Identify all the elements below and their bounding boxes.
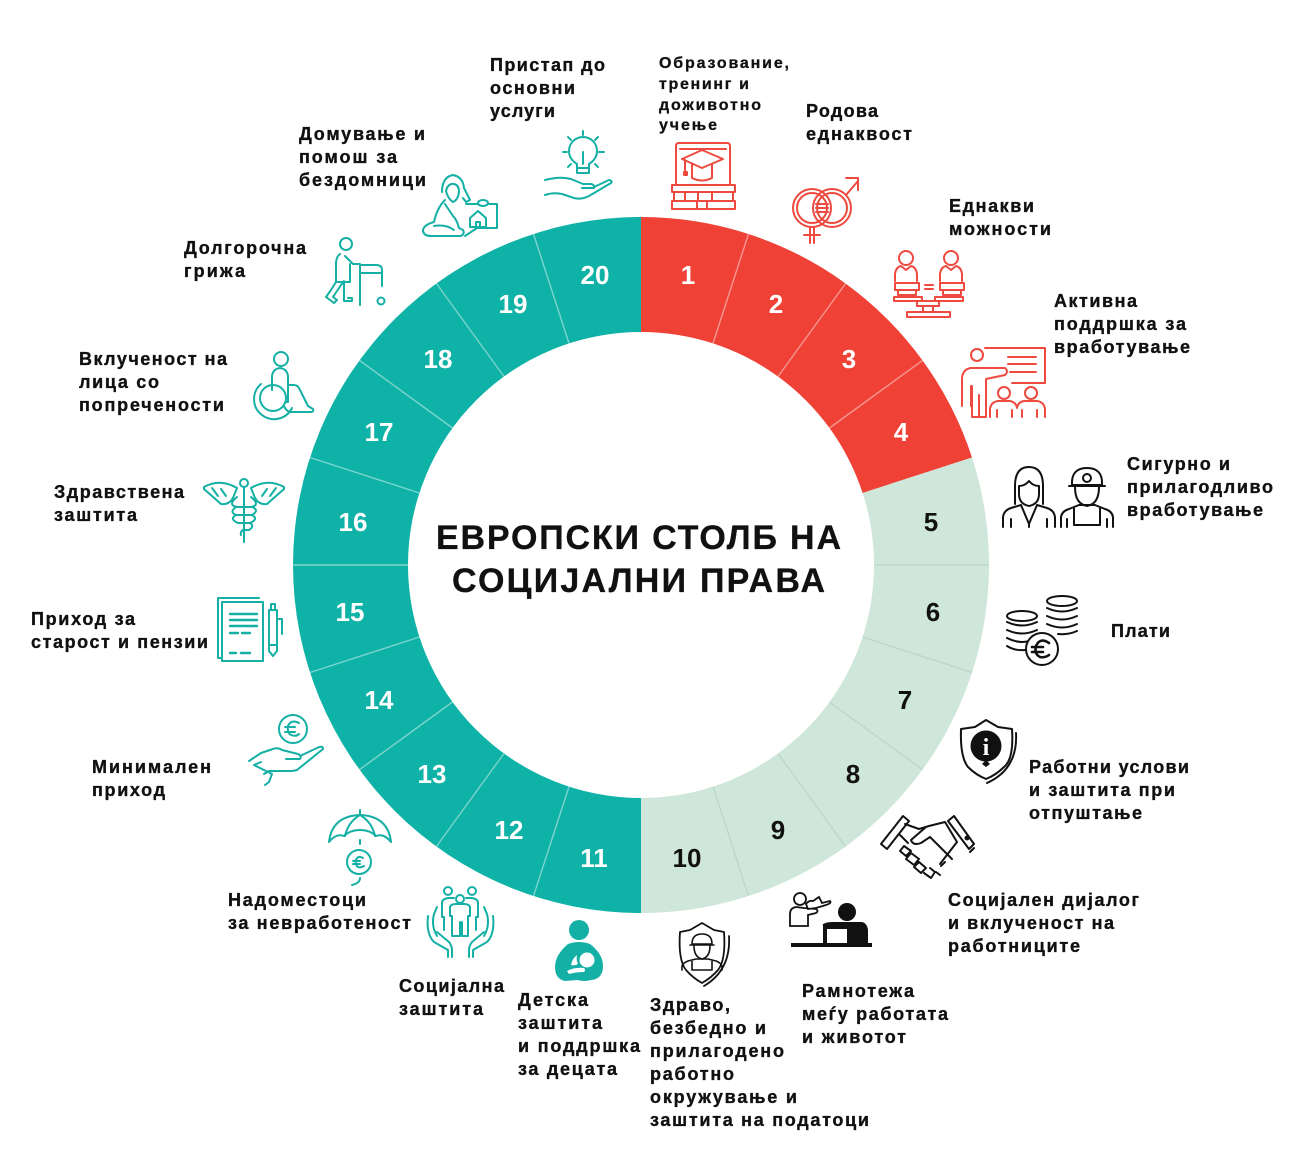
icon: equal opportunities scales bbox=[894, 251, 964, 317]
label: working conditions: Работни услови bbox=[1029, 757, 1189, 777]
segment numbers: 20 bbox=[581, 260, 609, 290]
label: access to essential services: Пристап до bbox=[490, 55, 605, 75]
icon: woman and miner bbox=[1003, 467, 1113, 527]
label: long-term care bbox=[184, 238, 307, 281]
label: healthy and safe work: безбедно и bbox=[650, 1018, 766, 1038]
icon: family in hands bbox=[428, 887, 493, 957]
icon: education laptop, cap and books bbox=[672, 143, 735, 209]
icon: homeless person with house bbox=[423, 175, 497, 236]
label: social dialogue: Социјален дијалог bbox=[948, 890, 1140, 910]
icon: gender equality bbox=[793, 178, 858, 243]
icon: umbrella with euro bbox=[329, 810, 391, 885]
title: СОЦИЈАЛНИ ПРАВА bbox=[452, 562, 825, 600]
label: work-life balance: Рамнотежа bbox=[802, 981, 915, 1001]
segment numbers: 12 bbox=[495, 815, 523, 845]
label: healthy and safe work: Здраво, bbox=[650, 995, 730, 1015]
label: unemployment benefits: Надоместоци bbox=[228, 890, 366, 910]
label: social dialogue bbox=[948, 890, 1140, 956]
label: inclusion of people with disabilities: попречености bbox=[79, 395, 224, 415]
segment group: pale green pillars 5-10 bbox=[641, 458, 989, 913]
title bbox=[436, 519, 841, 600]
label: gender equality: еднаквост bbox=[806, 124, 912, 144]
label: active employment support: Активна bbox=[1054, 291, 1138, 311]
label: minimum income: Минимален bbox=[92, 757, 211, 777]
label: inclusion of people with disabilities: лица со bbox=[79, 372, 159, 392]
label: childcare bbox=[518, 990, 641, 1079]
icon: handshake bbox=[881, 816, 974, 878]
label: housing and assistance for the homeless: Домување и bbox=[299, 124, 425, 144]
label: social dialogue: работниците bbox=[948, 936, 1080, 956]
label: healthcare: заштита bbox=[54, 505, 138, 525]
label: access to essential services: основни bbox=[490, 78, 575, 98]
label: housing and assistance for the homeless: помош за bbox=[299, 147, 398, 167]
segment group: teal pillars 11-20 bbox=[293, 217, 641, 913]
label: childcare: и поддршка bbox=[518, 1036, 641, 1056]
label: social dialogue: и вклученост на bbox=[948, 913, 1115, 933]
label: education: доживотно bbox=[659, 97, 761, 114]
label: housing and assistance for the homeless: бездомници bbox=[299, 170, 426, 190]
icon: elder with walker bbox=[326, 238, 384, 305]
label: gender equality: Родова bbox=[806, 101, 879, 121]
label: equal opportunities: Еднакви bbox=[949, 196, 1034, 216]
label: healthcare: Здравствена bbox=[54, 482, 185, 502]
icon: work-life balance bbox=[790, 893, 872, 947]
icon: teacher at board bbox=[962, 348, 1045, 417]
label: inclusion of people with disabilities: Вклученост на bbox=[79, 349, 228, 369]
segment numbers: 17 bbox=[365, 417, 393, 447]
label: childcare: за децата bbox=[518, 1059, 618, 1079]
label: social protection: заштита bbox=[399, 999, 484, 1019]
label: access to essential services bbox=[490, 55, 605, 121]
label: active employment support bbox=[1054, 291, 1190, 357]
segment numbers: 1 bbox=[681, 260, 695, 290]
label: healthy and safe work: прилагодено bbox=[650, 1041, 784, 1061]
icon: caduceus bbox=[204, 479, 284, 542]
label: gender equality bbox=[806, 101, 912, 144]
label: education bbox=[659, 55, 789, 134]
label: old age income and pensions: Приход за bbox=[31, 609, 136, 629]
segment numbers: 10 bbox=[673, 843, 701, 873]
label: access to essential services: услуги bbox=[490, 101, 555, 121]
segment numbers: 3 bbox=[842, 344, 856, 374]
segment numbers: 8 bbox=[846, 759, 860, 789]
label: old age income and pensions bbox=[31, 609, 208, 652]
segment group: red pillars 1-4 bbox=[641, 217, 972, 493]
label: healthy and safe work: заштита на податоци bbox=[650, 1110, 869, 1130]
label: work-life balance: и животот bbox=[802, 1027, 906, 1047]
label: healthcare bbox=[54, 482, 185, 525]
icon: light bulb in hand bbox=[545, 131, 612, 199]
segment numbers: 4 bbox=[894, 417, 909, 447]
label: social protection: Социјална bbox=[399, 976, 505, 996]
segment numbers: 15 bbox=[336, 597, 364, 627]
icon: coins with euro bbox=[1007, 596, 1077, 665]
label: healthy and safe work: окружување и bbox=[650, 1087, 797, 1107]
label: healthy and safe work: работно bbox=[650, 1064, 734, 1084]
label: secure employment: Сигурно и bbox=[1127, 454, 1230, 474]
segment numbers: 16 bbox=[339, 507, 367, 537]
segment numbers: 11 bbox=[580, 843, 608, 873]
label: unemployment benefits: за невработеност bbox=[228, 913, 411, 933]
label: secure employment: прилагодливо bbox=[1127, 477, 1273, 497]
label: inclusion of people with disabilities bbox=[79, 349, 228, 415]
label: working conditions: отпуштање bbox=[1029, 803, 1142, 823]
title: ЕВРОПСКИ СТОЛБ НА bbox=[436, 519, 841, 557]
label: minimum income: приход bbox=[92, 780, 166, 800]
label: housing and assistance for the homeless bbox=[299, 124, 426, 190]
label: education: учење bbox=[659, 117, 717, 134]
label: long-term care: грижа bbox=[184, 261, 246, 281]
icon: nursing mother bbox=[555, 920, 603, 981]
label: secure employment: вработување bbox=[1127, 500, 1263, 520]
label: minimum income bbox=[92, 757, 211, 800]
segment numbers: 2 bbox=[769, 289, 783, 319]
label: active employment support: вработување bbox=[1054, 337, 1190, 357]
segment numbers: 7 bbox=[898, 685, 912, 715]
segment numbers: 9 bbox=[771, 815, 785, 845]
label: secure employment bbox=[1127, 454, 1273, 520]
label: social protection bbox=[399, 976, 505, 1019]
label: working conditions bbox=[1029, 757, 1189, 823]
segment numbers: 14 bbox=[365, 685, 394, 715]
segment numbers: 6 bbox=[926, 597, 940, 627]
label: childcare: заштита bbox=[518, 1013, 603, 1033]
label: education: Образование, bbox=[659, 55, 789, 72]
icon: info shield bbox=[961, 720, 1016, 783]
ring chart: twenty pillars bbox=[293, 217, 989, 913]
segment numbers bbox=[336, 260, 940, 873]
icon: shield with worker bbox=[680, 923, 729, 986]
label: equal opportunities bbox=[949, 196, 1051, 239]
label: wages: Плати bbox=[1111, 621, 1170, 641]
icon: wheelchair user bbox=[254, 352, 313, 419]
icon: hand with euro bbox=[249, 715, 323, 785]
segment numbers: 18 bbox=[424, 344, 452, 374]
label: work-life balance: меѓу работата bbox=[802, 1004, 949, 1024]
label: active employment support: поддршка за bbox=[1054, 314, 1187, 334]
label: childcare: Детска bbox=[518, 990, 589, 1010]
icon: info shield: i bbox=[983, 735, 990, 761]
label: equal opportunities: можности bbox=[949, 219, 1051, 239]
label: unemployment benefits bbox=[228, 890, 411, 933]
segment numbers: 13 bbox=[418, 759, 446, 789]
label: healthy and safe work bbox=[650, 995, 869, 1130]
label: education: тренинг и bbox=[659, 76, 749, 93]
segment numbers: 5 bbox=[924, 507, 938, 537]
label: long-term care: Долгорочна bbox=[184, 238, 307, 258]
label: work-life balance bbox=[802, 981, 949, 1047]
label: working conditions: и заштита при bbox=[1029, 780, 1175, 800]
label: old age income and pensions: старост и пензии bbox=[31, 632, 208, 652]
icon: documents and pen bbox=[218, 598, 282, 661]
segment numbers: 19 bbox=[499, 289, 527, 319]
